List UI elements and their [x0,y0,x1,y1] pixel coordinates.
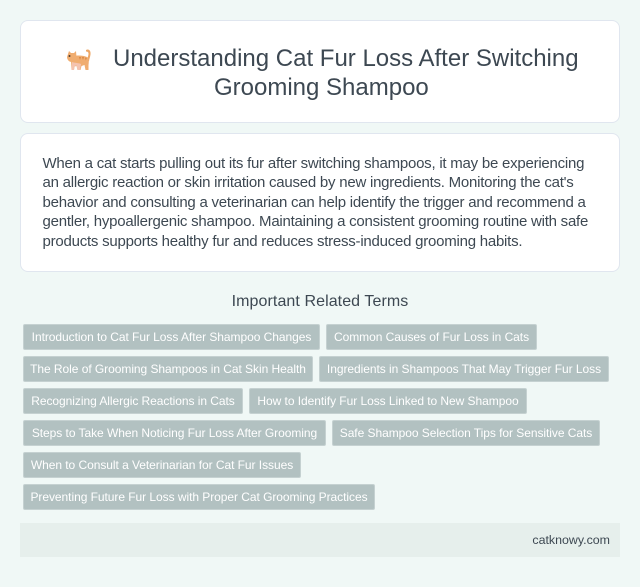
tag [23,356,313,382]
tag: Recognizing Allergic Reactions in Cats [31,394,235,408]
tag: Preventing Future Fur Loss with Proper Cat Grooming Practices [30,490,368,504]
tag [23,452,301,478]
footer source text: catknowy.com [532,533,610,547]
title text [113,45,579,101]
description text: gentler, hypoallergenic shampoo. Maintaining a consistent grooming routine with safe [42,213,588,230]
tag: Ingredients in Shampoos That May Trigger Fur Loss [327,362,601,376]
related terms tags [23,324,609,510]
tag: When to Consult a Veterinarian for Cat Fur Issues [31,458,293,472]
description text: behavior and consulting a veterinarian can help identify the trigger and recommend a [42,194,586,211]
tag: Common Causes of Fur Loss in Cats [334,330,529,344]
title text: Grooming Shampoo [214,74,429,101]
description text [42,155,588,250]
description text: When a cat starts pulling out its fur after switching shampoos, it may be experiencing [42,155,584,172]
tag [332,420,600,446]
tag: Steps to Take When Noticing Fur Loss After Grooming [32,426,317,440]
title text: Understanding Cat Fur Loss After Switching [113,45,579,72]
tag [23,324,320,350]
tag [23,420,326,446]
tag [23,484,375,510]
tag: How to Identify Fur Loss Linked to New Shampoo [257,394,519,408]
tag: The Role of Grooming Shampoos in Cat Skin Health [30,362,306,376]
description text: products supports healthy fur and reduces stress-induced grooming habits. [42,233,522,250]
section heading: Important Related Terms [232,293,408,310]
footer bar [20,523,620,557]
tag [23,388,243,414]
tag [326,324,537,350]
tag: Safe Shampoo Selection Tips for Sensitive Cats [340,426,592,440]
tag: Introduction to Cat Fur Loss After Shampoo Changes [32,330,311,344]
tag [249,388,527,414]
icon: cat [67,50,91,70]
title panel [20,20,620,123]
description panel [20,133,620,272]
tag [319,356,609,382]
description text: an allergic reaction or skin irritation caused by new ingredients. Monitoring the cat's [42,174,574,191]
